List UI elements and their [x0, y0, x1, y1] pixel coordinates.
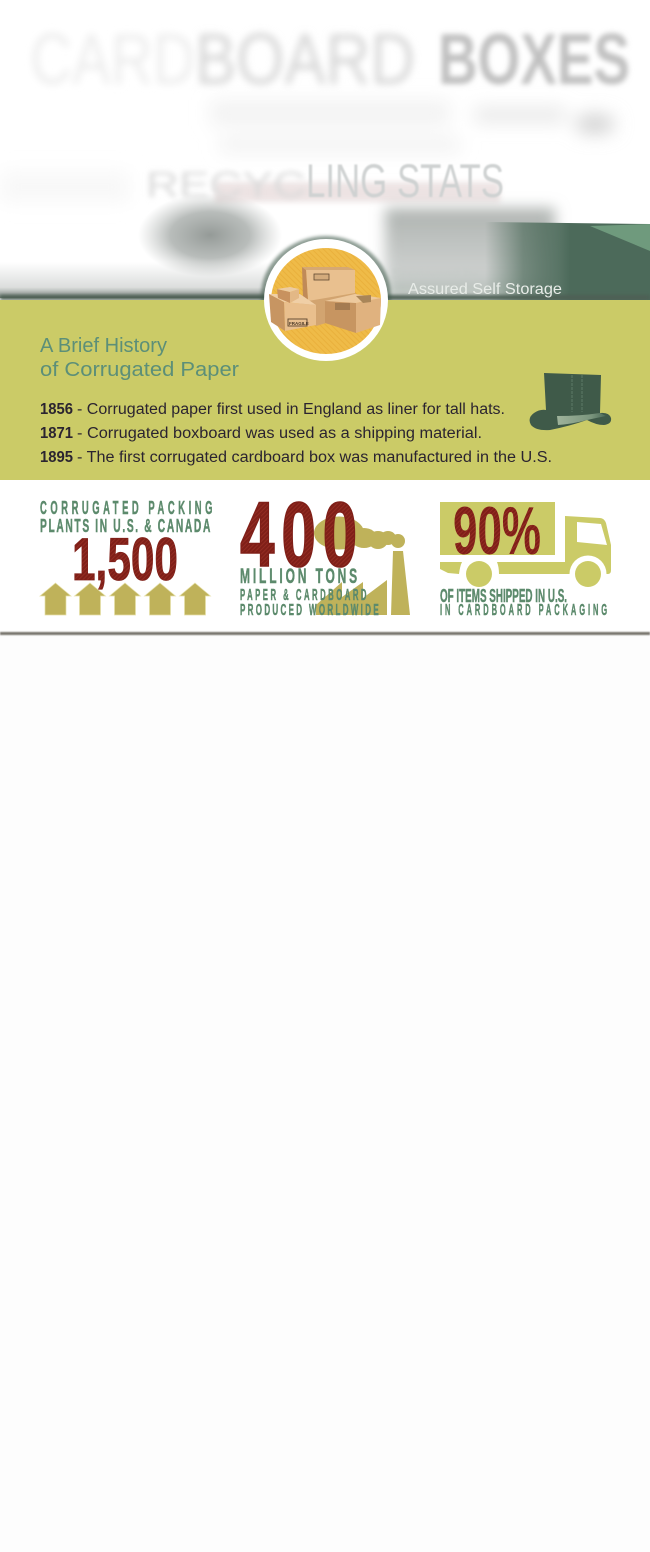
blurred title: BOARD: [195, 20, 415, 100]
circle shadow: [260, 234, 393, 300]
icon: truck: [440, 502, 611, 587]
olive history panel: [0, 300, 650, 480]
right box: [325, 294, 381, 333]
header bottom shadow: [0, 295, 650, 300]
stat unit: MILLION TONS: [240, 565, 360, 588]
sponsor name: Assured Self Storage: [408, 281, 562, 298]
blurred title: CARD: [30, 20, 195, 100]
history heading: of Corrugated Paper: [40, 359, 239, 381]
badge white ring: [264, 239, 388, 361]
recycling stats red smear: [215, 182, 500, 202]
stat label: CORRUGATED PACKING: [40, 497, 216, 518]
header dark green band: [485, 222, 650, 300]
stat label: PAPER & CARDBOARD: [240, 587, 369, 604]
icon: cardboard boxes badge: [264, 239, 388, 361]
entry 1856: - Corrugated paper first used in England as liner for tall hats.: [77, 401, 505, 418]
header light green corner: [590, 224, 650, 251]
stat: items shipped: [440, 493, 611, 619]
blurred subtitle smudges: [218, 104, 618, 141]
band bottom shadow: [0, 632, 650, 635]
entry 1856: 1856: [40, 401, 73, 418]
blurred header: [0, 30, 650, 300]
sponsor script smudge: Sponsored by: [392, 265, 478, 281]
stat number 1,500: 1,500: [72, 526, 178, 593]
stat label: [40, 497, 216, 536]
history timeline: [40, 401, 552, 466]
stat: million tons: [240, 484, 410, 619]
history heading: A Brief History: [40, 335, 167, 357]
small box: [277, 287, 299, 303]
blurred title: [34, 30, 630, 88]
stat label: PRODUCED WORLDWIDE: [240, 602, 381, 619]
stat label: PLANTS IN U.S. & CANADA: [40, 515, 212, 536]
entry 1871: 1871: [40, 425, 73, 442]
left box: FRAGILE: [289, 321, 309, 326]
recycling stats heading: LING STATS: [306, 154, 504, 207]
history heading: [40, 335, 239, 381]
badge orange disc: [271, 248, 381, 354]
stat number 90%: 90%: [453, 493, 541, 569]
header grey patch: [385, 208, 555, 300]
white stats band: [0, 480, 650, 632]
middle shadow box: [300, 293, 356, 326]
grey smudge left: [142, 196, 278, 274]
entry 1895: 1895: [40, 449, 73, 466]
entry 1871: - Corrugated boxboard was used as a shipping material.: [77, 425, 482, 442]
stat number 400: 400: [240, 484, 364, 586]
entry 1895: - The first corrugated cardboard box was manufactured in the U.S.: [77, 449, 552, 466]
infographic canvas: [0, 30, 650, 636]
top box: [302, 267, 355, 301]
stat: packing plants: [40, 497, 216, 615]
icon: row of arrows: [40, 583, 210, 615]
icon: factory with smoke: [314, 516, 410, 615]
recycling stats blurred start: RECYC: [146, 164, 306, 205]
header lower haze: [0, 268, 268, 298]
stat label: [240, 587, 381, 619]
icon: top hat: [530, 373, 611, 430]
